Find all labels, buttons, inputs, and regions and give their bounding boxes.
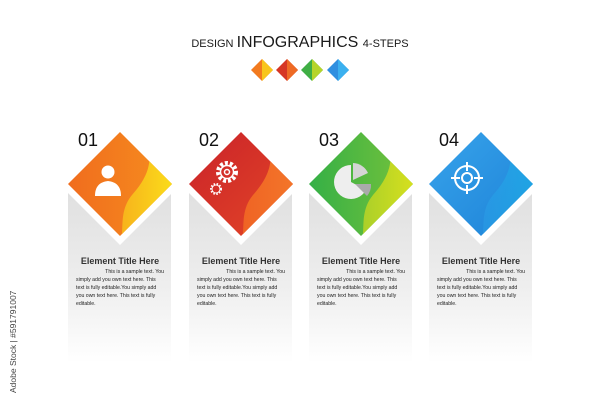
icon: target — [451, 162, 483, 194]
text: text is fully editable.You simply add — [317, 285, 397, 291]
card 02 — [189, 132, 293, 326]
card 01 — [68, 132, 172, 326]
text: simply add you own text here. This — [437, 277, 517, 283]
text: editable. — [197, 301, 217, 307]
text: you own text here. This text is fully — [437, 293, 517, 299]
text: simply add you own text here. This — [76, 277, 156, 283]
icon: person — [95, 166, 121, 196]
number: 01 — [78, 130, 98, 150]
text: editable. — [437, 301, 457, 307]
title: DESIGN INFOGRAPHICS 4-STEPS — [191, 34, 409, 51]
icon: gears — [211, 163, 236, 194]
text — [317, 269, 405, 307]
text: simply add you own text here. This — [317, 277, 397, 283]
text: This is a sample text. You — [346, 269, 405, 275]
text: you own text here. This text is fully — [197, 293, 277, 299]
text: you own text here. This text is fully — [76, 293, 156, 299]
text: This is a sample text. You — [226, 269, 285, 275]
small color diamonds — [251, 59, 349, 81]
text: you own text here. This text is fully — [317, 293, 397, 299]
number: 04 — [439, 130, 459, 150]
title: Element Title Here — [442, 256, 520, 266]
stock id vertical text: Adobe Stock | #591791007 — [8, 290, 18, 393]
card 04 — [429, 132, 533, 326]
icon: pie chart — [334, 163, 371, 199]
text: text is fully editable.You simply add — [76, 285, 156, 291]
title: Element Title Here — [202, 256, 280, 266]
text: This is a sample text. You — [105, 269, 164, 275]
title: Element Title Here — [322, 256, 400, 266]
text — [197, 269, 285, 307]
text — [76, 269, 164, 307]
text: text is fully editable.You simply add — [197, 285, 277, 291]
text: editable. — [76, 301, 96, 307]
text — [437, 269, 525, 307]
title: Element Title Here — [81, 256, 159, 266]
text: text is fully editable.You simply add — [437, 285, 517, 291]
text: editable. — [317, 301, 337, 307]
text: simply add you own text here. This — [197, 277, 277, 283]
card 03 — [309, 132, 413, 326]
text: This is a sample text. You — [466, 269, 525, 275]
number: 03 — [319, 130, 339, 150]
number: 02 — [199, 130, 219, 150]
